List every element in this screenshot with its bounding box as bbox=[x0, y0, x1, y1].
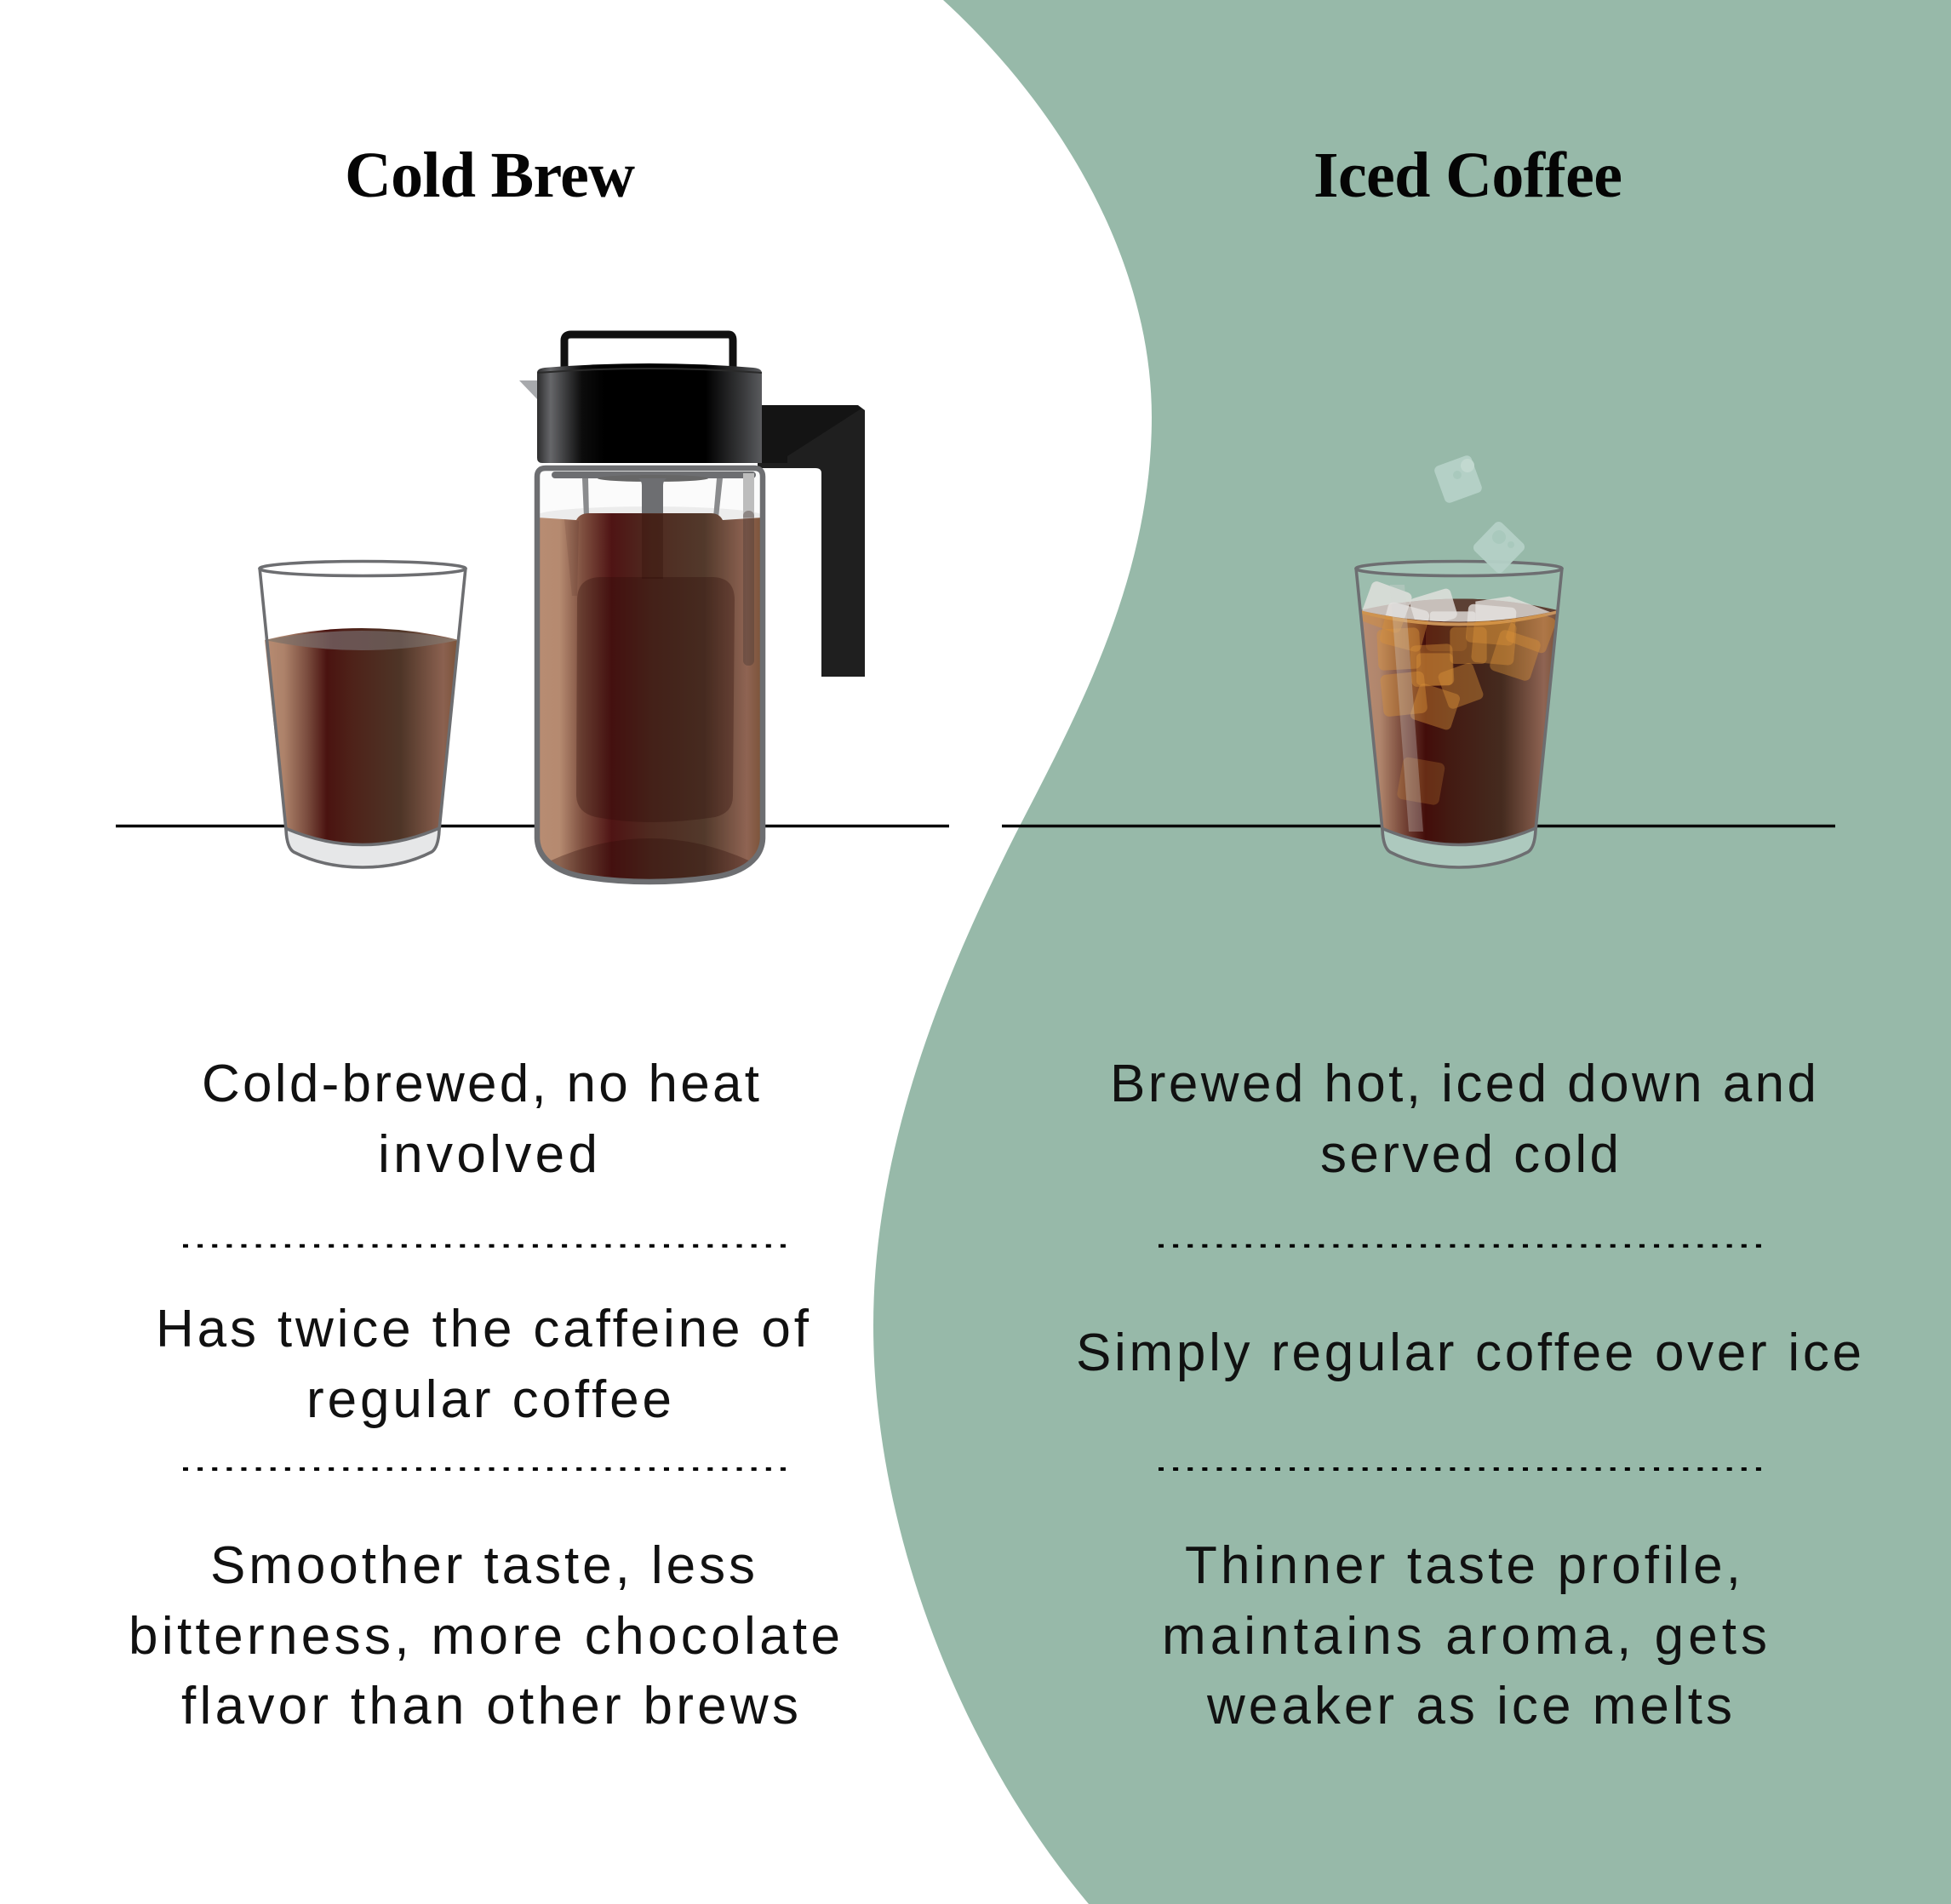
text block: iced coffee row 1: Brewed hot, iced down and bbox=[1110, 1055, 1817, 1113]
submerged ice cubes bbox=[1359, 580, 1557, 806]
text block: cold brew row 2 bbox=[156, 1300, 810, 1429]
glass outline bbox=[1356, 568, 1562, 867]
text block: iced coffee row 3: weaker as ice melts bbox=[1206, 1677, 1732, 1735]
heading: Iced Coffee: Iced Coffee bbox=[1313, 140, 1622, 211]
text block: iced coffee row 1 bbox=[1110, 1055, 1817, 1184]
counter line left bbox=[116, 825, 949, 827]
text block: cold brew row 3: bitterness, more chocolate bbox=[129, 1607, 840, 1666]
text block: iced coffee row 3 bbox=[1162, 1536, 1767, 1735]
text block: iced coffee row 1: served cold bbox=[1320, 1125, 1619, 1184]
lid bbox=[537, 363, 762, 463]
text block: cold brew row 1: involved bbox=[378, 1125, 598, 1184]
text block: iced coffee row 2: Simply regular coffee over ice bbox=[1076, 1324, 1862, 1382]
icon: cold brew pitcher bbox=[519, 334, 865, 885]
text block: cold brew row 2: Has twice the caffeine of bbox=[156, 1300, 810, 1358]
text block: cold brew row 1 bbox=[202, 1055, 759, 1184]
strainer bbox=[552, 472, 756, 517]
text block: cold brew row 3: flavor than other brews bbox=[181, 1677, 798, 1735]
text block: cold brew row 2: regular coffee bbox=[306, 1370, 672, 1429]
inner filter bbox=[564, 519, 579, 596]
background: green wave panel bbox=[873, 0, 1951, 1904]
bottom shade bbox=[552, 838, 749, 878]
text block: iced coffee row 3: Thinner taste profile, bbox=[1185, 1536, 1741, 1595]
text block: cold brew row 1: Cold-brewed, no heat bbox=[202, 1055, 759, 1113]
text block: cold brew row 3: Smoother taste, less bbox=[210, 1536, 755, 1595]
icon: falling ice cube upper bbox=[1433, 455, 1483, 504]
counter line right bbox=[1002, 825, 1835, 827]
text block: cold brew row 3 bbox=[129, 1536, 840, 1735]
heading: Cold Brew: Cold Brew bbox=[345, 140, 635, 211]
lid loop bbox=[564, 334, 733, 368]
text block: iced coffee row 3: maintains aroma, gets bbox=[1162, 1607, 1767, 1666]
coffee bbox=[537, 513, 763, 885]
glass outline bbox=[537, 468, 763, 882]
handle bbox=[758, 405, 865, 677]
glass jar bbox=[536, 468, 763, 885]
tube bbox=[743, 511, 754, 666]
spout bbox=[519, 380, 538, 400]
icon: falling ice cube lower bbox=[1471, 519, 1527, 575]
ice above surface bbox=[1362, 581, 1556, 621]
icon: iced coffee glass bbox=[1356, 562, 1562, 867]
icon: cold brew glass bbox=[260, 562, 466, 867]
straw bbox=[1390, 585, 1423, 832]
